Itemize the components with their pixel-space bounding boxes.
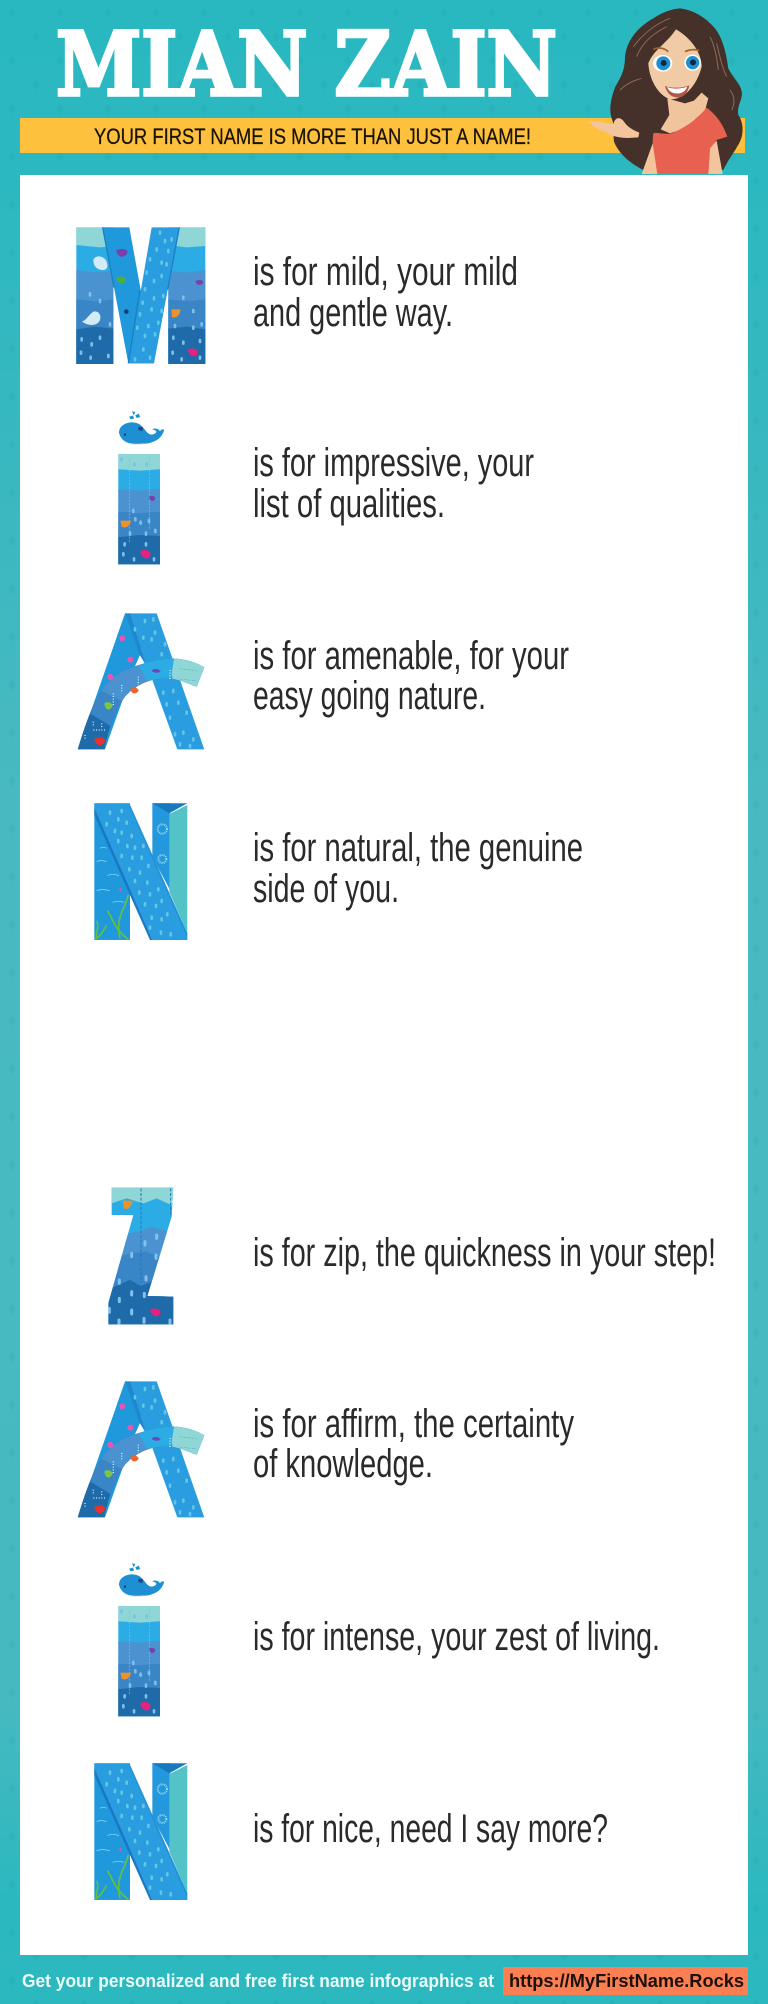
icon: whale [119, 1563, 164, 1597]
row: A [73, 613, 569, 753]
icon: letter N [94, 803, 187, 940]
icon: fish [116, 249, 203, 285]
banner [20, 118, 745, 153]
icon: letter I with whale [118, 411, 164, 564]
text: I line: is for impressive, your [253, 441, 534, 485]
text: I line [253, 441, 534, 526]
text: A line: easy going nature. [253, 674, 486, 718]
row: N [94, 803, 583, 940]
text: M line: is for mild, your mild [253, 250, 518, 294]
icon: whale [119, 411, 164, 445]
text: A line [253, 1402, 574, 1486]
link badge: https://MyFirstName.Rocks [509, 1971, 744, 1991]
title: MIAN ZAIN [56, 12, 557, 116]
icon: letter I with whale [118, 1563, 164, 1716]
illustration: woman [590, 8, 743, 174]
text: N line: is for natural, the genuine [253, 826, 583, 870]
hand [590, 118, 639, 138]
icon: small whales [82, 256, 107, 325]
text: N line [253, 826, 583, 911]
icon: letter A [73, 1381, 210, 1521]
row: A second [73, 1381, 574, 1521]
icon: letter N [94, 1763, 187, 1900]
text: M line [253, 250, 518, 335]
text: N line: is for nice, need I say more? [253, 1807, 608, 1851]
banner: YOUR FIRST NAME IS MORE THAN JUST A NAME! [94, 124, 531, 149]
text: A line: of knowledge. [253, 1442, 433, 1486]
row: I second [118, 1563, 660, 1716]
icon: letter M [76, 227, 205, 364]
text: A line: is for amenable, for your [253, 634, 569, 678]
footer [22, 1967, 748, 1995]
row: N second [94, 1763, 608, 1900]
row: Z [107, 1187, 716, 1325]
text: M line: and gentle way. [253, 291, 453, 335]
text: N line: side of you. [253, 867, 399, 911]
footer: Get your personalized and free first name infographics at [22, 1971, 494, 1991]
link badge [503, 1967, 748, 1995]
icon: letter Z [107, 1187, 175, 1325]
text: A line: is for affirm, the certainty [253, 1402, 574, 1446]
icon: letter A [73, 613, 210, 753]
text: A line [253, 634, 569, 718]
row: M [76, 227, 518, 364]
row: I [118, 411, 534, 564]
text: I line: list of qualities. [253, 482, 445, 526]
